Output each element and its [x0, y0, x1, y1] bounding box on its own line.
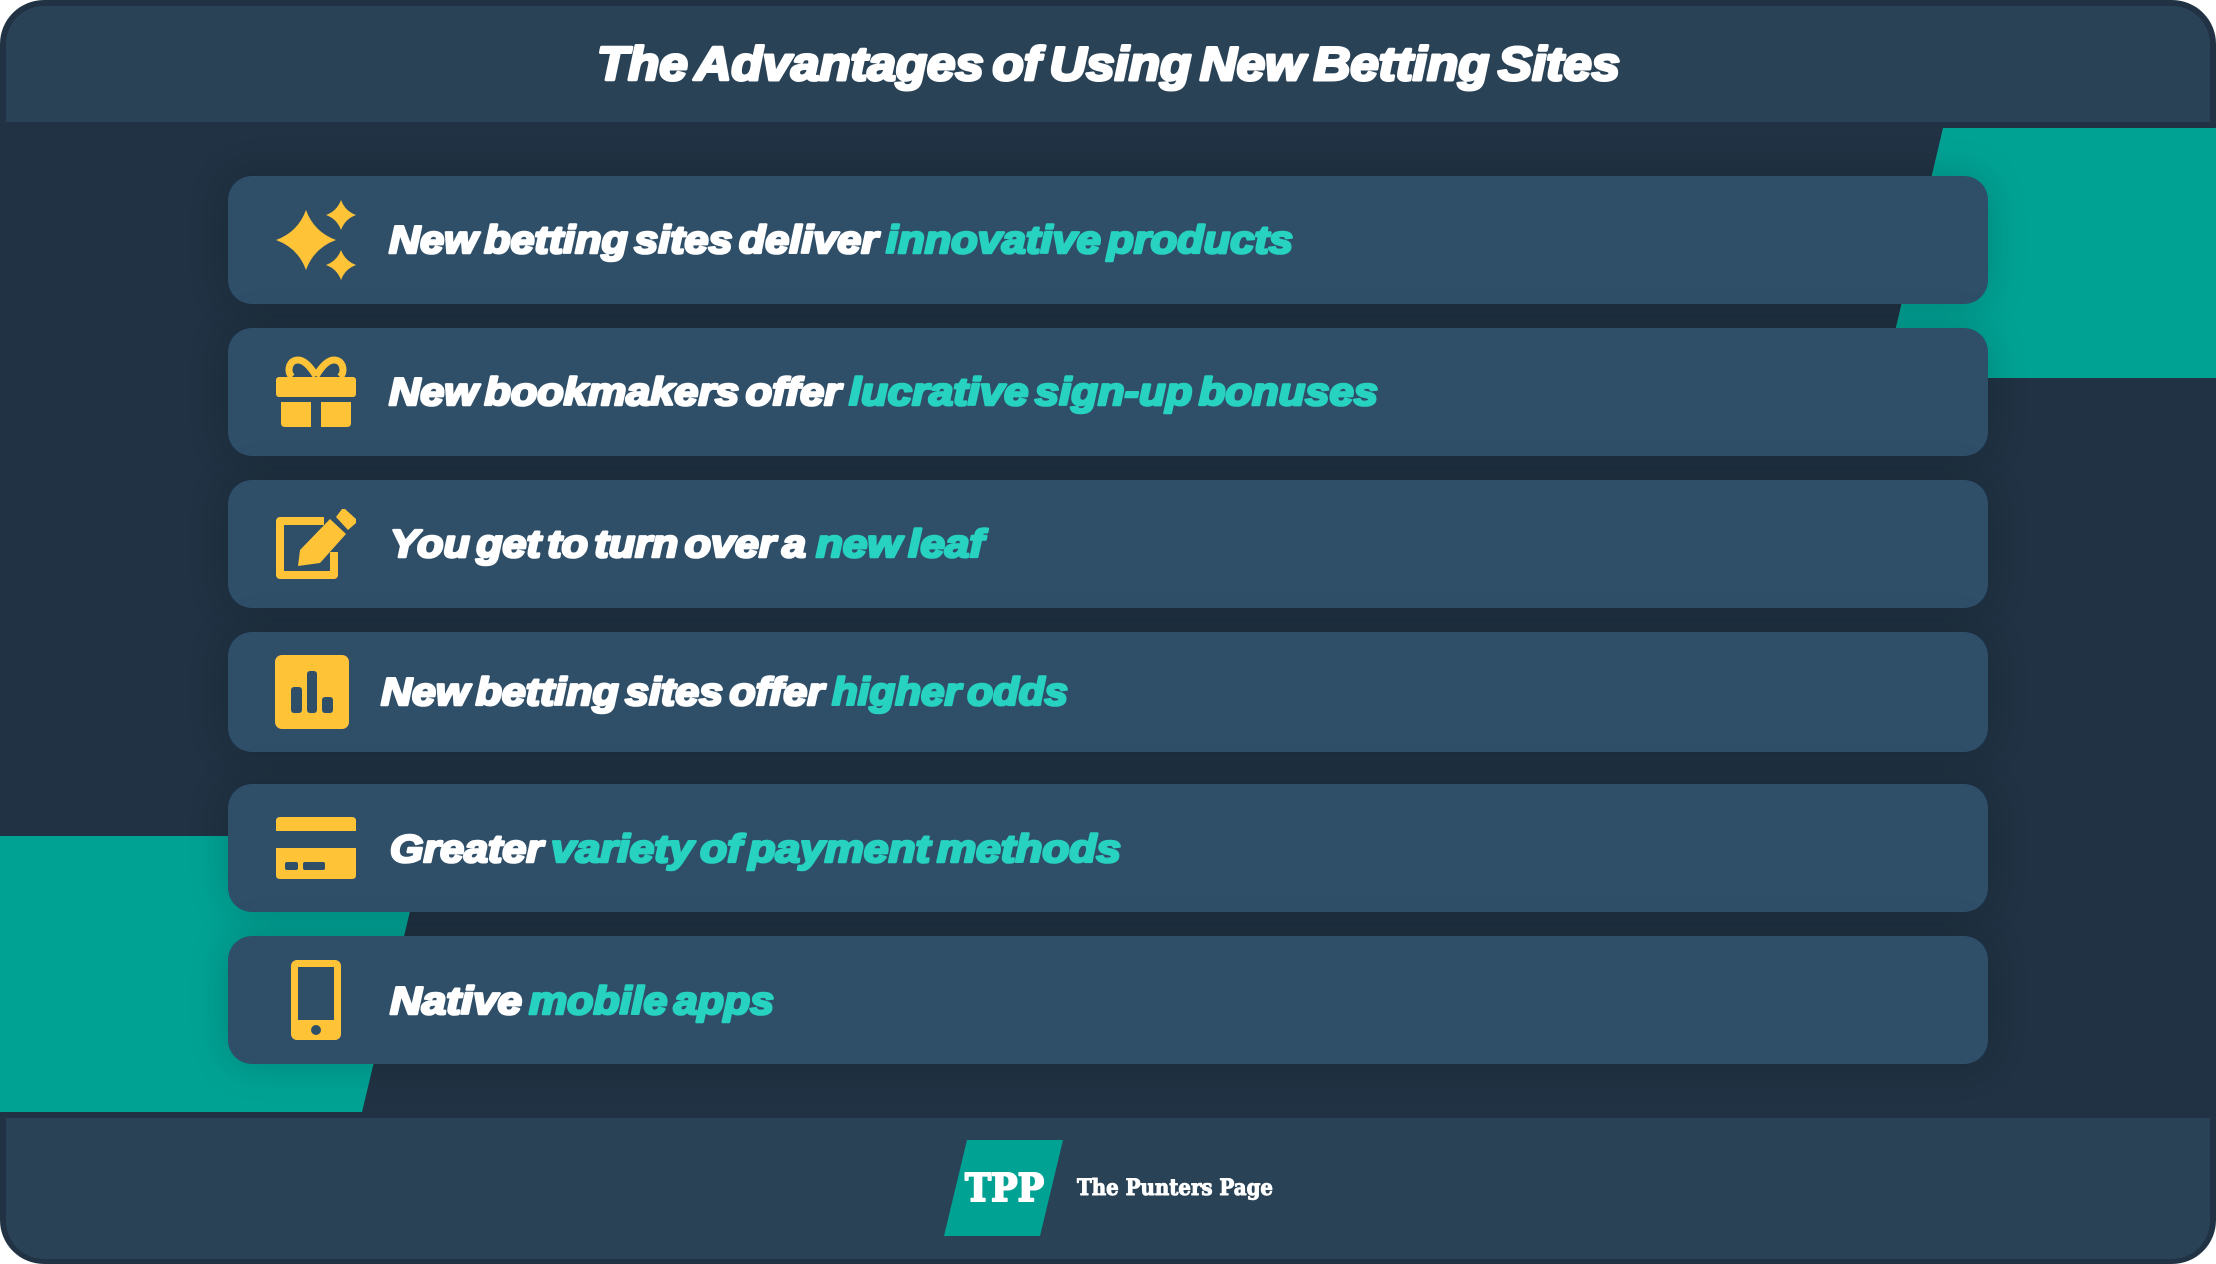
text: innovative products: New betting sites deliver	[389, 219, 880, 262]
title: The Advantages of Using New Betting Sites	[597, 37, 1620, 90]
icon: pencil and square	[280, 509, 356, 575]
text: sign-up bonuses	[389, 371, 1378, 414]
text: new leaf: new leaf	[816, 523, 989, 566]
text: sign-up bonuses: New bookmakers offer	[389, 371, 843, 414]
text: new leaf	[390, 523, 989, 566]
icon: gift	[276, 360, 356, 427]
text: mobile apps: Native	[390, 980, 522, 1023]
logo: TPP badge	[944, 1140, 1063, 1236]
card: higher odds	[228, 632, 1988, 752]
text: mobile apps	[390, 980, 774, 1023]
brand name: The Punters Page	[1077, 1175, 1273, 1201]
icon: sparkles	[276, 200, 356, 280]
icon: smartphone	[291, 960, 341, 1040]
text: mobile apps: mobile apps	[529, 980, 774, 1023]
icon: bar chart	[275, 655, 349, 729]
text: payment methods	[390, 828, 1121, 871]
card: innovative products	[228, 176, 1988, 304]
card: mobile apps	[228, 936, 1988, 1064]
text: payment methods: variety of payment methods	[551, 828, 1121, 871]
text: innovative products	[389, 219, 1293, 262]
text: higher odds	[381, 671, 1068, 714]
text: sign-up bonuses: lucrative sign-up bonuses	[849, 371, 1378, 414]
card: sign-up bonuses	[228, 328, 1988, 456]
text: higher odds: New betting sites offer	[381, 671, 826, 714]
card: payment methods	[228, 784, 1988, 912]
text: higher odds: higher odds	[832, 671, 1068, 714]
text: new leaf: You get to turn over a	[390, 523, 806, 566]
card: new leaf	[228, 480, 1988, 608]
footer band	[6, 1118, 2210, 1259]
logo: TPP badge: TPP	[965, 1165, 1044, 1210]
icon: credit card	[276, 817, 356, 879]
text: innovative products: innovative products	[886, 219, 1293, 262]
header band	[6, 6, 2210, 122]
text: payment methods: Greater	[390, 828, 545, 871]
